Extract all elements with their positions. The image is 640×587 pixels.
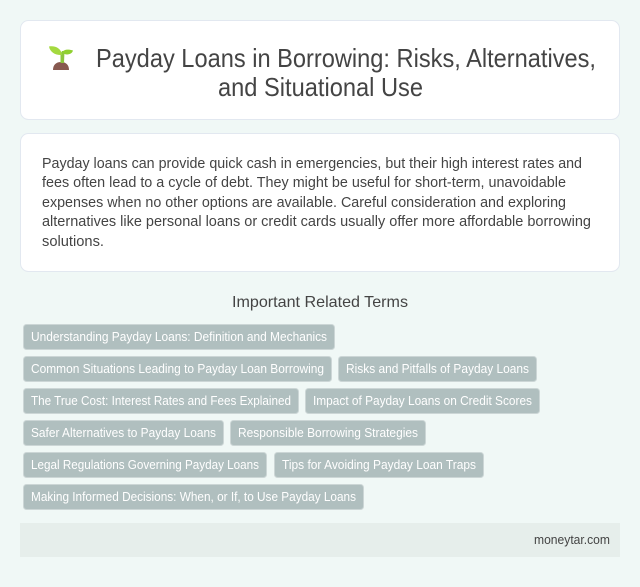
panel: title card	[20, 20, 620, 120]
tag: making informed decisions	[24, 484, 364, 510]
tag: impact on credit scores: Impact of Payday Loans on Credit Scores	[313, 394, 532, 408]
tag: tips for avoiding traps	[274, 452, 484, 478]
tag: understanding payday loans	[24, 324, 334, 350]
title: and Situational Use	[218, 74, 423, 102]
tag: responsible borrowing: Responsible Borrowing Strategies	[238, 426, 418, 440]
tag: impact on credit scores	[306, 388, 540, 414]
tag: risks and pitfalls	[338, 356, 536, 382]
tag: legal regulations: Legal Regulations Governing Payday Loans	[31, 458, 259, 472]
summary text: expenses when no other options are available. Careful consideration and exploring	[42, 195, 566, 211]
summary text: Payday loans can provide quick cash in emergencies, but their high interest rates and	[42, 156, 582, 172]
tag: making informed decisions: Making Informed Decisions: When, or If, to Use Payday Loans	[31, 490, 356, 504]
tag: the true cost: The True Cost: Interest Rates and Fees Explained	[31, 394, 291, 408]
tag: responsible borrowing	[230, 420, 426, 446]
summary text: fees often lead to a cycle of debt. They might be useful for short-term, unavoidable	[42, 175, 566, 191]
tag: the true cost	[24, 388, 298, 414]
footer: moneytar.com	[534, 533, 610, 547]
footer	[20, 523, 620, 557]
tag: common situations	[24, 356, 332, 382]
tag: legal regulations	[24, 452, 266, 478]
tag: understanding payday loans: Understanding Payday Loans: Definition and Mechanics	[31, 330, 327, 344]
summary text: solutions.	[42, 234, 104, 250]
summary text: alternatives like personal loans or credit cards usually offer more affordable borrowing	[42, 214, 591, 230]
tag: safer alternatives: Safer Alternatives to Payday Loans	[31, 426, 216, 440]
title	[96, 45, 596, 102]
icon: sprout	[49, 46, 73, 70]
summary text	[42, 156, 591, 250]
panel: summary	[20, 134, 620, 272]
heading: important related terms: Important Related Terms	[232, 294, 408, 311]
title: Payday Loans in Borrowing: Risks, Alternatives,	[96, 45, 596, 73]
tag: tips for avoiding traps: Tips for Avoiding Payday Loan Traps	[282, 458, 476, 472]
tag: risks and pitfalls: Risks and Pitfalls of Payday Loans	[346, 362, 529, 376]
tag: safer alternatives	[24, 420, 224, 446]
tag: common situations: Common Situations Leading to Payday Loan Borrowing	[31, 362, 324, 376]
